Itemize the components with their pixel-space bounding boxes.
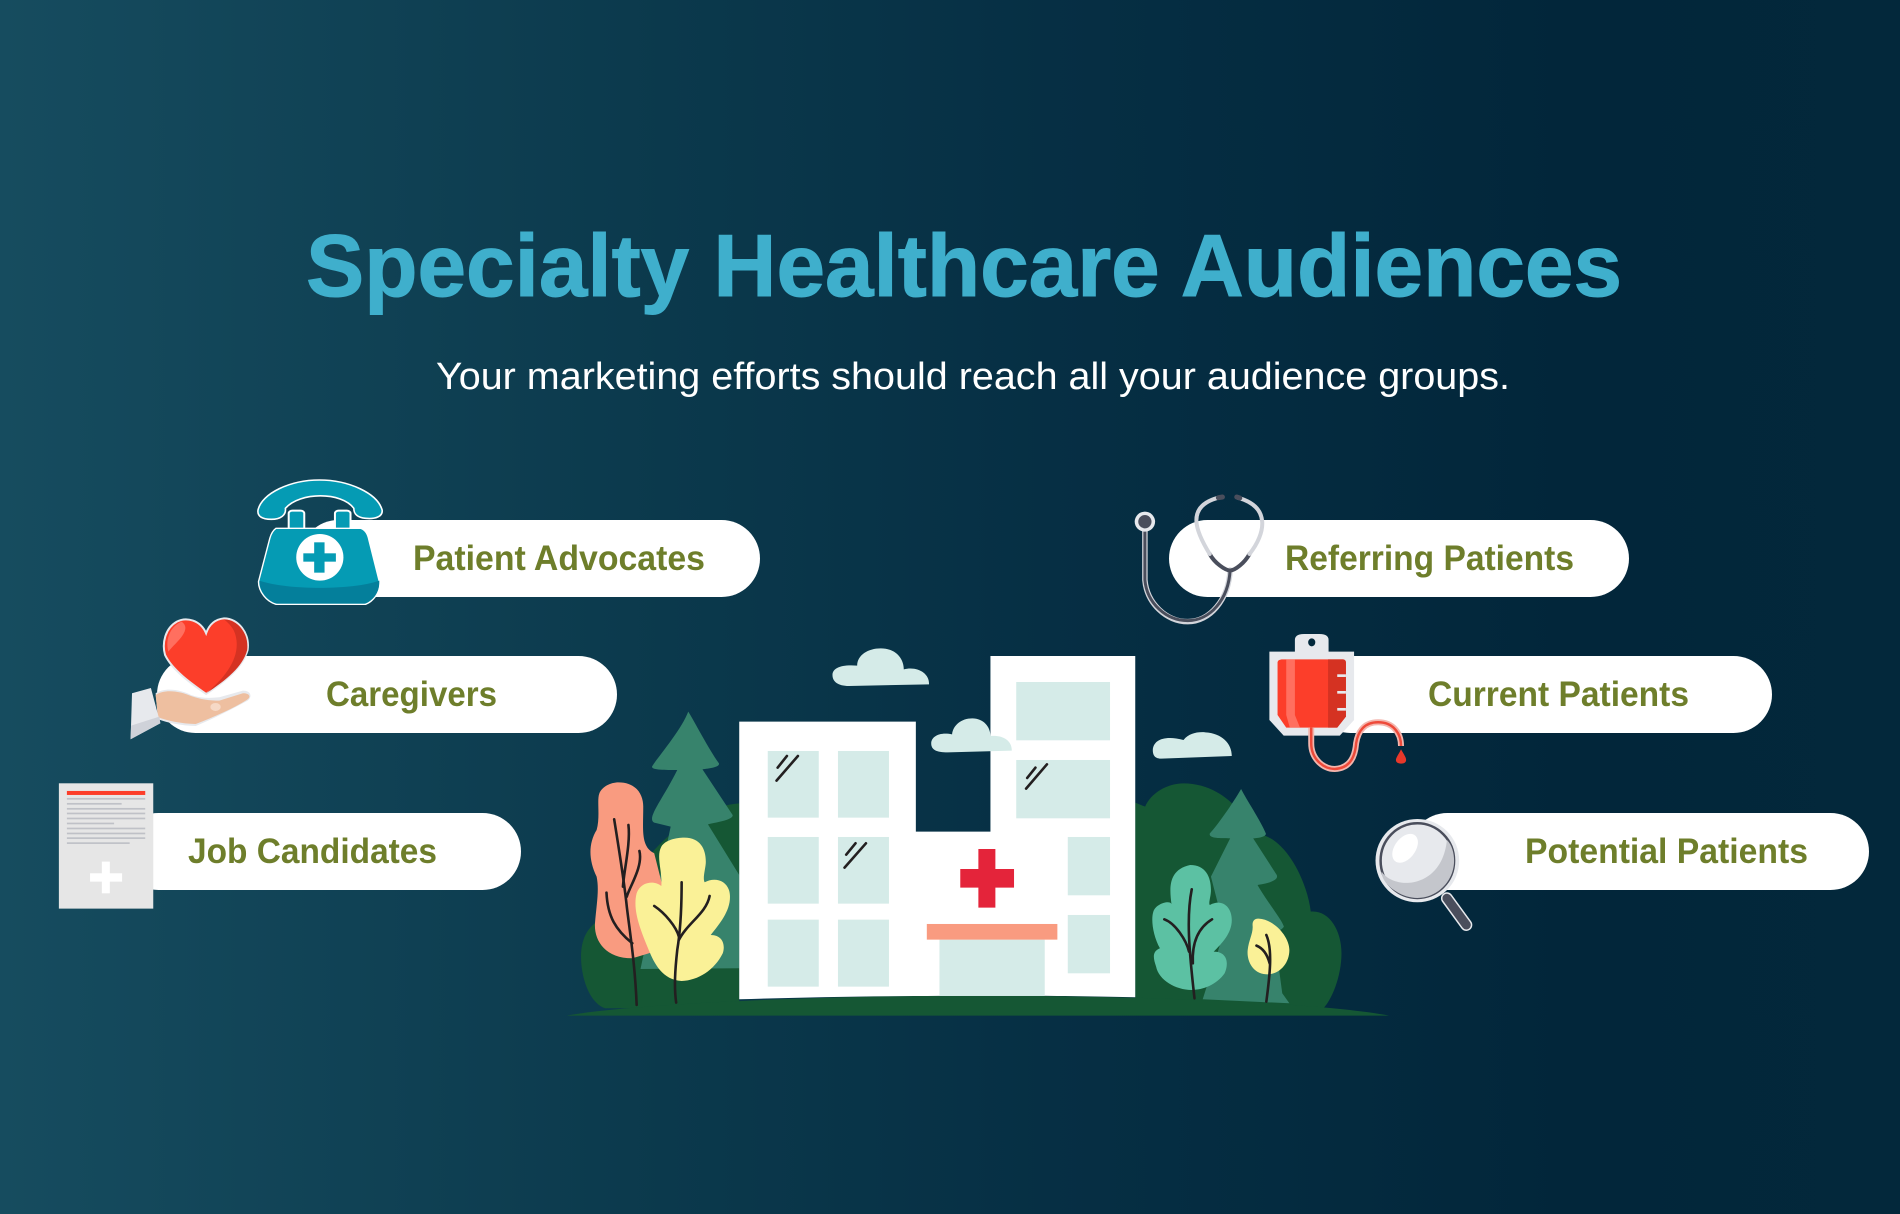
pill: Job Candidates xyxy=(120,813,521,890)
door xyxy=(939,940,1045,996)
pill: Patient Advocates: Patient Advocates xyxy=(413,539,705,578)
icon: medical document xyxy=(59,783,153,909)
icon: medical telephone xyxy=(258,480,382,604)
ground xyxy=(566,996,1389,1016)
pill: Referring Patients xyxy=(1169,520,1629,597)
icon: IV blood bag xyxy=(1269,634,1406,769)
cloud right xyxy=(1153,732,1232,759)
icon: stethoscope xyxy=(1135,497,1262,622)
subtitle: Your marketing efforts should reach all your audience groups. xyxy=(436,356,1510,398)
yellow tree xyxy=(635,838,730,1003)
left bush xyxy=(581,803,739,1008)
illustration: hospital scene xyxy=(566,648,1389,1016)
cloud middle xyxy=(931,718,1012,752)
pill: Current Patients xyxy=(1312,656,1772,733)
pill: Current Patients: Current Patients xyxy=(1428,675,1689,714)
entrance canopy xyxy=(927,924,1057,940)
icon: magnifying glass xyxy=(1376,819,1466,925)
right pine xyxy=(1203,789,1289,1003)
title: Specialty Healthcare Audiences xyxy=(306,216,1622,315)
orange tree xyxy=(590,782,665,1005)
left pine xyxy=(641,712,739,969)
teal tree xyxy=(1152,865,1232,998)
cloud left xyxy=(832,648,929,686)
hospital building xyxy=(739,656,1135,999)
pill: Caregivers: Caregivers xyxy=(326,675,497,714)
icon: hand holding heart xyxy=(131,618,250,739)
right bush xyxy=(1135,783,1341,1008)
windows xyxy=(768,682,1110,987)
pill: Job Candidates: Job Candidates xyxy=(188,832,437,871)
pill: Caregivers xyxy=(157,656,617,733)
pill: Potential Patients xyxy=(1409,813,1869,890)
red cross xyxy=(960,849,1014,908)
pill: Referring Patients: Referring Patients xyxy=(1285,539,1574,578)
window reflections xyxy=(777,756,1047,868)
small yellow tree xyxy=(1248,919,1289,1002)
pill: Patient Advocates xyxy=(300,520,760,597)
pill: Potential Patients: Potential Patients xyxy=(1525,832,1808,871)
